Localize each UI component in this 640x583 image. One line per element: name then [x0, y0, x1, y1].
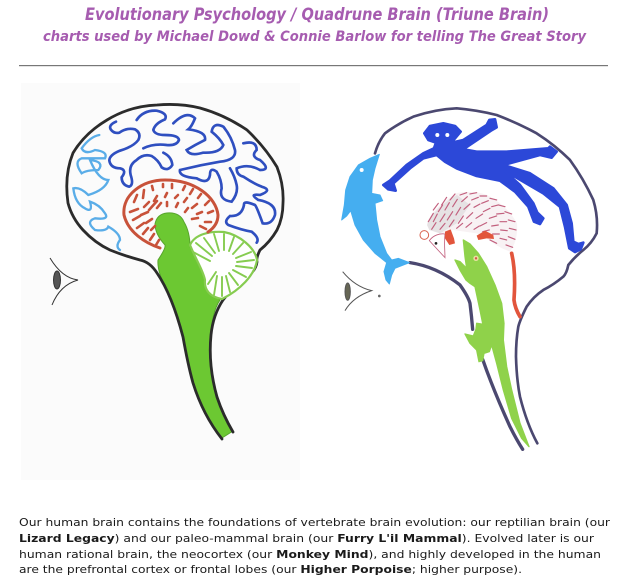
lizard	[455, 240, 529, 447]
caption text	[19, 516, 611, 576]
panel: animal brain drawing	[342, 108, 597, 449]
subtitle: charts used by Michael Dowd & Connie Barlow for telling The Great Story	[43, 29, 586, 45]
panel: anatomical brain drawing	[21, 83, 300, 480]
monkey	[383, 119, 583, 252]
hedgehog tail	[512, 253, 520, 317]
caption text: are the prefrontal cortex or frontal lobes (our Higher Porpoise ; higher purpose).	[19, 563, 522, 576]
prefrontal gyri in light blue	[73, 135, 120, 250]
brain stem in green	[155, 213, 233, 438]
title: Evolutionary Psychology / Quadrune Brain (Triune Brain)	[85, 5, 549, 24]
limbic system in red	[124, 180, 218, 248]
title	[43, 5, 586, 45]
brain outline	[67, 104, 283, 439]
caption text: Our human brain contains the foundations of vertebrate brain evolution: our reptilian brain (our	[19, 516, 611, 529]
dolphin	[342, 154, 409, 284]
caption text: Lizard Legacy ) and our paleo-mammal brain (our Furry L'il Mammal ). Evolved later is our	[19, 532, 595, 545]
icon: eye	[50, 258, 78, 305]
icon: eye	[343, 272, 372, 311]
cerebellum wheel	[190, 232, 257, 299]
hedgehog	[420, 192, 517, 258]
brain outline in dark ink	[375, 108, 597, 449]
caption text: human rational brain, the neocortex (our Monkey Mind ), and highly developed in the human	[19, 548, 601, 561]
neocortex gyri in dark blue	[109, 111, 275, 243]
